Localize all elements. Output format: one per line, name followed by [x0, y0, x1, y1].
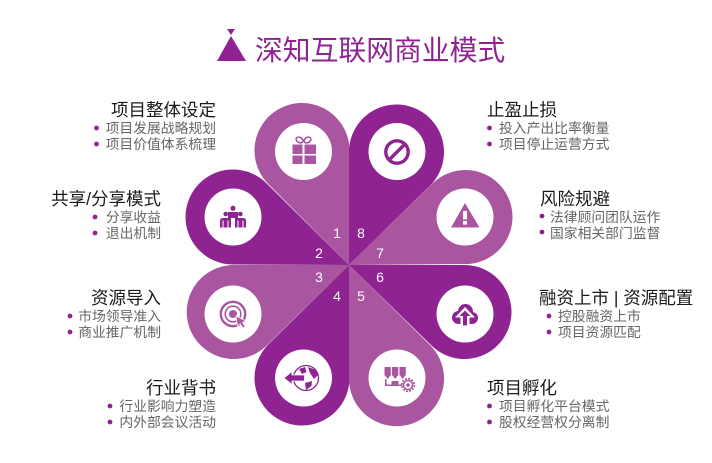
panel: 共享/分享模式: 分享收益 [106, 209, 161, 225]
icon: target [221, 302, 246, 328]
panel: 共享/分享模式 [51, 189, 161, 241]
petal 3 [187, 265, 349, 359]
icon: gift [292, 136, 316, 164]
panel: 项目整体设定: 项目价值体系梳理 [106, 137, 216, 152]
panel: 项目孵化 [487, 378, 610, 430]
panel: 融资上市 | 资源配置: 融资上市 | 资源配置 [539, 288, 693, 308]
numbers: 2 [315, 245, 323, 261]
petal 6 [349, 265, 511, 359]
panel: 止盈止损: 投入产出比率衡量 [499, 120, 610, 136]
petal 2 [186, 170, 349, 265]
petal 5 [349, 265, 444, 426]
panel: 风险规避 [540, 189, 661, 241]
panel: 资源导入: 市场领导准入 [78, 308, 161, 324]
numbers: 7 [376, 245, 384, 261]
panel: 共享/分享模式: 共享/分享模式 [51, 189, 161, 209]
numbers: 4 [333, 288, 341, 304]
title text: 深知互联网商业模式 [255, 35, 505, 66]
numbers: 8 [357, 225, 365, 241]
numbers: 5 [357, 288, 365, 304]
panel: 行业背书: 内外部会议活动 [119, 415, 216, 430]
title [217, 29, 505, 66]
panel: 共享/分享模式: 退出机制 [106, 226, 161, 241]
icon: warning [451, 203, 480, 228]
panel: 融资上市 | 资源配置: 项目资源匹配 [558, 325, 641, 340]
petal 7 [349, 170, 512, 265]
icon: title triangle mark [217, 29, 246, 61]
numbers: 6 [376, 269, 384, 285]
panel: 行业背书 [108, 378, 216, 430]
icon: people [220, 206, 246, 228]
panel: 止盈止损: 止盈止损 [487, 100, 557, 120]
icon: cloud upload [452, 304, 478, 326]
panel: 融资上市 | 资源配置 [539, 288, 693, 340]
panel: 资源导入 [68, 288, 161, 340]
panel: 项目孵化: 项目孵化平台模式 [499, 399, 610, 414]
panel: 项目整体设定: 项目发展战略规划 [106, 121, 216, 136]
panel: 项目整体设定: 项目整体设定 [111, 100, 216, 120]
numbers [315, 225, 384, 304]
panel: 项目整体设定 [94, 100, 216, 152]
icon: globe with arrows [284, 366, 318, 390]
numbers: 3 [315, 269, 323, 285]
panel: 项目孵化: 股权经营权分离制 [499, 414, 609, 430]
panel: 行业背书: 行业背书 [146, 378, 216, 398]
flower diagram [186, 103, 512, 426]
panel: 行业背书: 行业影响力塑造 [119, 399, 216, 414]
petal 1 [255, 103, 350, 265]
panel: 资源导入: 资源导入 [91, 288, 161, 308]
petal 4 [255, 265, 350, 425]
panel: 风险规避: 法律顾问团队运作 [550, 210, 661, 225]
petal 8 [349, 105, 444, 265]
panel: 止盈止损 [487, 100, 610, 152]
icon: prohibition [386, 141, 408, 163]
numbers: 1 [333, 225, 341, 241]
icon: incubator shop with gear [384, 367, 414, 391]
panel: 融资上市 | 资源配置: 控股融资上市 [558, 308, 641, 324]
panel: 止盈止损: 项目停止运营方式 [499, 136, 610, 152]
panel: 项目孵化: 项目孵化 [487, 378, 557, 398]
panel: 资源导入: 商业推广机制 [78, 325, 161, 340]
panel: 风险规避: 风险规避 [540, 189, 610, 209]
white icon discs [204, 123, 494, 406]
panel: 风险规避: 国家相关部门监督 [550, 225, 661, 241]
